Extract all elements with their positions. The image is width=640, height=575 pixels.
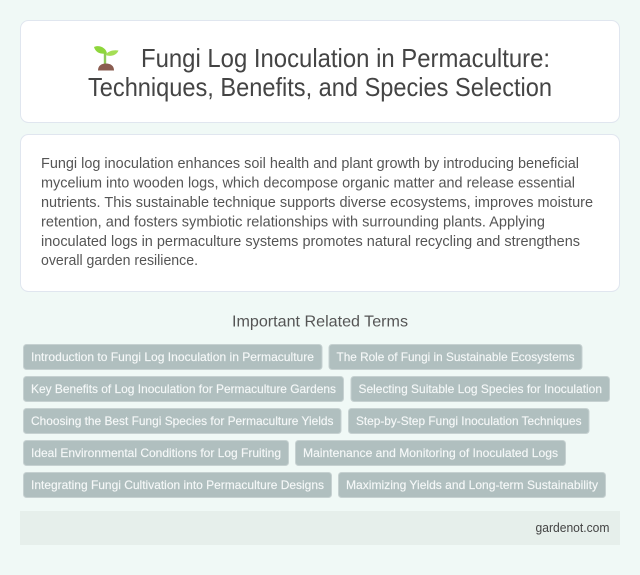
title — [88, 45, 552, 102]
heading: important related terms: Important Related Terms — [232, 314, 408, 330]
panel: summary text: retention, and fosters symbiotic relationships with surrounding plants. Applying — [41, 214, 545, 230]
title: Fungi Log Inoculation in Permaculture: — [141, 45, 550, 73]
tag — [24, 408, 341, 434]
footer — [20, 511, 620, 545]
tag: Selecting Suitable Log Species for Inoculation — [358, 382, 602, 396]
tag: Ideal Environmental Conditions for Log Fruiting — [31, 446, 281, 460]
tag: Maximizing Yields and Long-term Sustainability — [346, 478, 598, 492]
panel: summary text: mycelium into wooden logs, which decompose organic matter and release essential — [41, 174, 575, 192]
panel: summary text: Fungi log inoculation enhances soil health and plant growth by introducing beneficial — [41, 155, 579, 172]
tag: Introduction to Fungi Log Inoculation in Permaculture — [31, 350, 314, 364]
icon: seedling — [94, 46, 118, 70]
tag — [338, 472, 606, 498]
tag: Integrating Fungi Cultivation into Permaculture Designs — [31, 478, 324, 492]
panel: summary text: nutrients. This sustainable technique supports diverse ecosystems, improves moisture — [41, 194, 593, 211]
tag: Choosing the Best Fungi Species for Permaculture Yields — [31, 414, 334, 428]
tag — [24, 344, 322, 370]
panel: summary text: overall garden resilience. — [41, 252, 198, 269]
tag — [351, 376, 610, 402]
footer: gardenot.com — [536, 521, 610, 535]
panel: title card — [20, 20, 620, 122]
tag — [24, 472, 332, 498]
tag — [348, 408, 589, 434]
panel: summary text: inoculated logs in permaculture systems promotes natural recycling and strengthens — [41, 233, 580, 250]
tag: Maintenance and Monitoring of Inoculated Logs — [303, 446, 558, 460]
tag — [296, 440, 566, 466]
tag: Step-by-Step Fungi Inoculation Techniques — [356, 414, 582, 428]
tag — [329, 344, 582, 370]
panel: summary text — [20, 134, 620, 292]
tag: The Role of Fungi in Sustainable Ecosystems — [336, 350, 574, 364]
tag — [24, 440, 288, 466]
tag — [24, 376, 344, 402]
panel: related term tags — [24, 344, 610, 498]
title: Techniques, Benefits, and Species Selection — [88, 74, 552, 102]
tag: Key Benefits of Log Inoculation for Permaculture Gardens — [31, 382, 336, 396]
